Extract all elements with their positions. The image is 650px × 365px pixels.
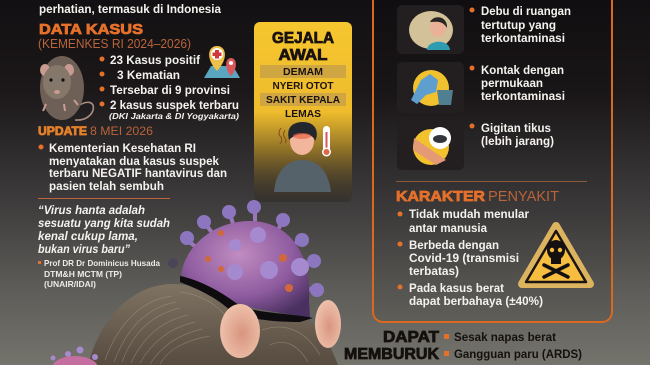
list: complications: Sesak napas berat xyxy=(454,332,556,344)
quote attribution: Prof DR Dr Dominicus Husada xyxy=(44,258,160,268)
text: surface contact: Kontak dengan xyxy=(481,65,564,77)
text: update detail: terbaru NEGATIF hantavirus dan xyxy=(49,168,227,180)
list: complications: Gangguan paru (ARDS) xyxy=(454,349,582,361)
panel: early symptoms xyxy=(254,22,352,202)
list: disease character: Covid-19 (transmisi xyxy=(409,253,519,265)
icon: rat ears xyxy=(220,300,341,358)
text: surface contact: permukaan xyxy=(481,78,543,90)
heading: data kasus: DATA KASUS xyxy=(39,21,143,38)
text: rat bite: (lebih jarang) xyxy=(481,136,554,148)
list: case data: Tersebar di 9 provinsi xyxy=(110,85,230,97)
list: disease character xyxy=(398,209,543,308)
list: case data: 3 Kematian xyxy=(117,70,180,82)
icon card: rat bite xyxy=(397,122,464,170)
icon: danger sign xyxy=(522,226,590,284)
symptom list: SAKIT KEPALA xyxy=(266,94,340,106)
list: case data: 2 kasus suspek terbaru xyxy=(110,100,239,112)
list: case data: (DKI Jakarta & DI Yogyakarta) xyxy=(109,111,239,121)
intro text: perhatian, termasuk di Indonesia xyxy=(39,4,222,16)
text: surface contact: terkontaminasi xyxy=(481,91,565,103)
heading: karakter penyakit xyxy=(396,188,559,205)
list: disease character: Tidak mudah menular xyxy=(409,209,530,221)
list: complications xyxy=(444,332,582,361)
text: update detail: Kementerian Kesehatan RI xyxy=(49,143,196,155)
list: case data: 23 Kasus positif xyxy=(110,55,200,67)
text: update detail: pasien telah sembuh xyxy=(49,181,164,193)
quote: kenal cukup lama, xyxy=(38,231,138,243)
list: disease character: antar manusia xyxy=(409,223,488,235)
text: update detail xyxy=(38,143,227,193)
list: disease character: Berbeda dengan xyxy=(409,240,499,252)
heading: update: 8 MEI 2026 xyxy=(90,126,153,138)
text: surface contact xyxy=(470,65,565,103)
heading: dapat memburuk: DAPAT xyxy=(383,329,439,346)
list: disease character: Pada kasus berat xyxy=(409,283,504,295)
icon card: surface contact xyxy=(397,62,464,113)
heading: update: UPDATE xyxy=(38,126,87,138)
heading: update xyxy=(38,126,153,138)
icon card: dust xyxy=(397,5,464,54)
icon: map pin xyxy=(204,46,240,78)
quote: “Virus hanta adalah xyxy=(38,205,145,217)
text: dust: terkontaminasi xyxy=(481,33,565,45)
text: rat bite xyxy=(470,123,554,148)
heading: gejala awal: GEJALA xyxy=(272,30,334,47)
heading: gejala awal xyxy=(272,30,334,64)
text: rat bite: Gigitan tikus xyxy=(481,123,551,135)
rat body and head xyxy=(88,284,338,365)
heading: karakter penyakit: PENYAKIT xyxy=(488,188,559,205)
icon: large virus xyxy=(168,200,324,322)
heading: dapat memburuk xyxy=(344,329,439,363)
quote attribution: (UNAIR/IDAI) xyxy=(44,279,96,289)
list: disease character: dapat berbahaya (±40%) xyxy=(409,296,543,308)
list: disease character: terbatas) xyxy=(409,266,459,278)
quote attribution xyxy=(38,258,160,289)
panel: transmission and disease character xyxy=(373,0,612,322)
heading: gejala awal: AWAL xyxy=(278,47,328,64)
text: dust: Debu di ruangan xyxy=(481,6,571,18)
quote: sesuatu yang kita sudah xyxy=(38,218,170,230)
symptom list: NYERI OTOT xyxy=(272,80,334,92)
icon: rat xyxy=(40,56,93,120)
text: dust: tertutup yang xyxy=(481,20,556,32)
symptom list: DEMAM xyxy=(283,66,323,78)
quote attribution: DTM&H MCTM (TP) xyxy=(44,269,122,279)
heading: dapat memburuk: MEMBURUK xyxy=(344,346,439,363)
text: update detail: menyatakan dua kasus suspek xyxy=(49,156,220,168)
heading: karakter penyakit: KARAKTER xyxy=(396,188,485,205)
symptom list xyxy=(260,65,346,120)
list: case data xyxy=(100,55,239,121)
icon: small virus xyxy=(50,346,98,365)
symptom list: LEMAS xyxy=(285,108,321,120)
quote: bukan virus baru” xyxy=(38,244,130,256)
icon: feverish person xyxy=(274,122,331,192)
subheading: source: (KEMENKES RI 2024–2026) xyxy=(38,37,191,51)
quote xyxy=(38,205,170,256)
text: dust xyxy=(470,6,571,45)
